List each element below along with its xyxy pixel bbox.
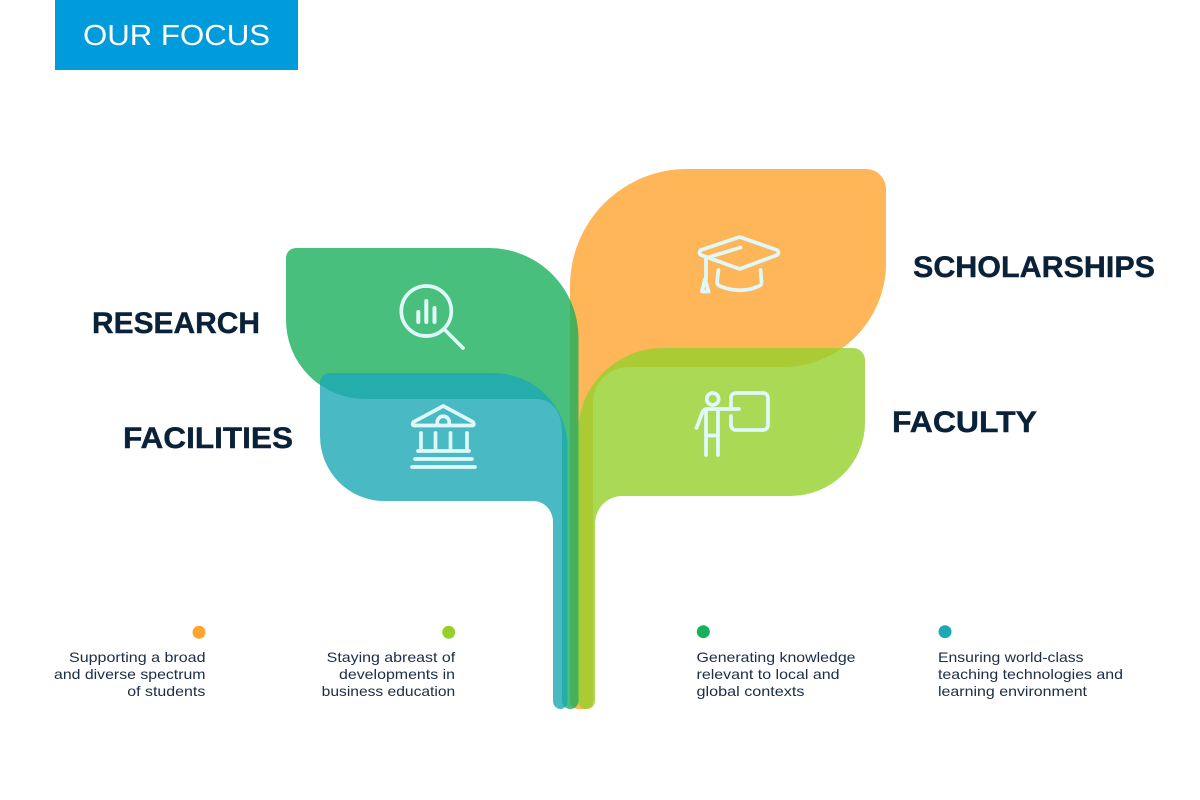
- legend: facilities description: Ensuring world-class: [938, 649, 1084, 665]
- panel: facilities leaf: [320, 373, 568, 709]
- heading: research: RESEARCH: [92, 307, 260, 340]
- icon: institution building: [412, 406, 475, 467]
- legend: research description: [696, 625, 856, 699]
- heading: scholarships: SCHOLARSHIPS: [913, 251, 1155, 284]
- legend: faculty description: business education: [322, 683, 455, 699]
- legend: faculty description: [322, 626, 455, 699]
- legend: scholarships description: and diverse spectrum: [54, 666, 206, 682]
- legend: faculty description: developments in: [339, 666, 455, 682]
- legend: research description: relevant to local and: [696, 666, 840, 682]
- legend: research description: global contexts: [696, 683, 804, 699]
- icon: teacher at board: [696, 393, 768, 455]
- legend: facilities description: teaching technologies and: [938, 666, 1123, 682]
- legend: facilities description: [938, 625, 1123, 699]
- icon: graduation cap: [700, 237, 778, 292]
- panel: scholarships leaf: [570, 169, 886, 709]
- legend: faculty description: Staying abreast of: [327, 649, 455, 665]
- heading: faculty: FACULTY: [892, 406, 1037, 439]
- title banner: OUR FOCUS: [83, 20, 270, 52]
- heading: facilities: FACILITIES: [123, 422, 293, 455]
- title banner: [55, 0, 298, 70]
- panel: faculty leaf: [578, 348, 865, 709]
- legend: scholarships description: of students: [127, 683, 205, 699]
- icon: magnifier with bars: [401, 286, 463, 348]
- legend: scholarships description: Supporting a broad: [69, 649, 206, 665]
- legend: research description: Generating knowledge: [696, 649, 856, 665]
- panel: research leaf: [286, 248, 578, 709]
- legend: scholarships description: [54, 626, 206, 699]
- legend: facilities description: learning environment: [938, 683, 1087, 699]
